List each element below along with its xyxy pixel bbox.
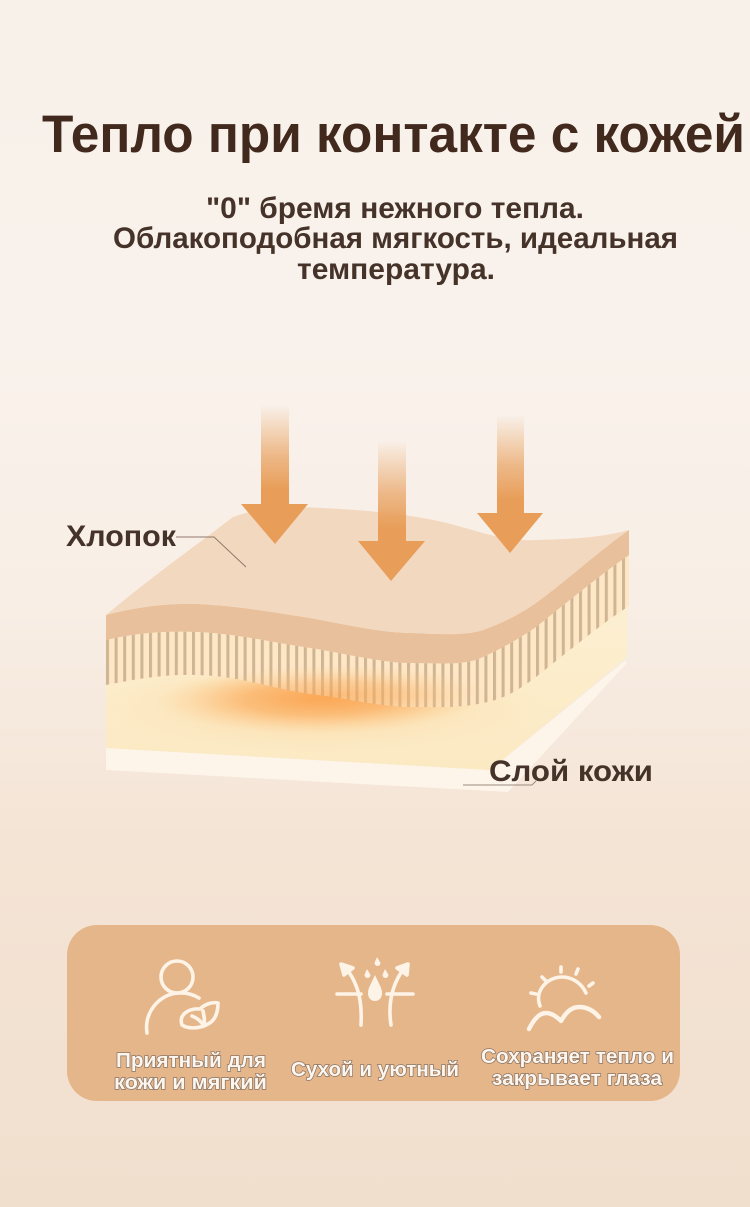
warm filling layer <box>106 555 629 770</box>
label: keeps warm: Сохраняет тепло и <box>481 1045 674 1068</box>
subtitle text block: Облакоподобная мягкость, идеальная <box>113 222 678 255</box>
arrow 3 <box>477 415 543 553</box>
layered fabric diagram <box>95 405 629 792</box>
label: cotton: Хлопок <box>66 520 177 553</box>
heat glow over fibres <box>190 665 490 725</box>
label: dry and cozy: Сухой и уютный <box>291 1058 459 1081</box>
arrow 1 <box>241 405 308 544</box>
icon: moisture wicking <box>337 958 413 1025</box>
heat glow <box>155 666 475 734</box>
skin leader line <box>463 781 536 785</box>
subtitle text block <box>113 192 678 286</box>
heat halo <box>95 657 545 753</box>
cotton leader line <box>176 537 246 567</box>
title: Тепло при контакте с кожей <box>42 105 745 164</box>
panel: benefits <box>67 925 680 1101</box>
fibres <box>106 556 629 708</box>
cotton top surface <box>106 507 629 634</box>
label: keeps warm: закрывает глаза <box>492 1067 663 1090</box>
cotton side band <box>106 530 629 663</box>
arrow 2 <box>358 442 425 581</box>
label: skin layer: Слой кожи <box>489 755 653 788</box>
icon: sun and cloud <box>529 967 599 1029</box>
skin layer <box>106 660 626 792</box>
label: skin friendly <box>114 1049 267 1094</box>
subtitle text block: температура. <box>297 253 495 286</box>
subtitle text block: "0" бремя нежного тепла. <box>206 192 584 225</box>
label: skin friendly: Приятный для <box>116 1049 266 1072</box>
label: skin friendly: кожи и мягкий <box>114 1071 267 1094</box>
label: keeps warm <box>481 1045 674 1090</box>
icon: person with leaf <box>147 961 218 1033</box>
